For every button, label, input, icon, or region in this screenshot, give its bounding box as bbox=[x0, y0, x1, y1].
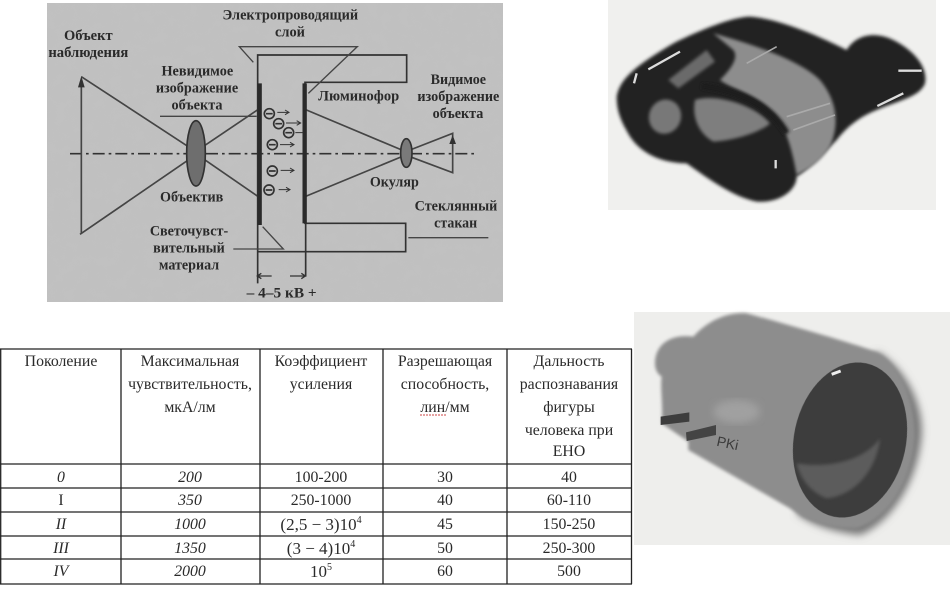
generation II row bbox=[55, 515, 595, 534]
mid body panel bbox=[694, 98, 770, 142]
electrons bbox=[264, 109, 303, 195]
labels: Видимое bbox=[431, 72, 486, 88]
object arrow and rays bbox=[80, 77, 453, 234]
dark strap bbox=[702, 86, 787, 133]
labels: стакан bbox=[434, 215, 477, 231]
labels: Электропроводящий bbox=[222, 8, 358, 24]
labels: Объект bbox=[64, 28, 113, 44]
generation I row: 60-110 bbox=[547, 492, 591, 509]
generation I row: 250-1000 bbox=[291, 492, 351, 509]
body highlight bbox=[713, 400, 760, 423]
leader lines bbox=[160, 116, 488, 249]
generation I row: 350 bbox=[177, 492, 202, 509]
left lens bbox=[644, 95, 686, 138]
top barrel bbox=[668, 50, 715, 88]
glass housing bbox=[258, 55, 407, 283]
column headers: Поколение bbox=[25, 353, 97, 370]
column headers: Коэффициент bbox=[275, 353, 367, 370]
column headers: лин/мм bbox=[420, 399, 470, 416]
labels bbox=[48, 8, 499, 302]
generation IV row: 500 bbox=[557, 563, 581, 580]
photo: night vision binocular bbox=[608, 0, 936, 210]
optical axis bbox=[70, 151, 477, 156]
photocathode and phosphor bbox=[260, 83, 305, 225]
generation II row: II bbox=[55, 516, 67, 533]
generation 0 row: 40 bbox=[561, 469, 577, 486]
table: image intensifier generations bbox=[0, 349, 632, 584]
labels: объекта bbox=[171, 97, 222, 113]
generation IV row: 5 bbox=[327, 562, 332, 573]
generation III row: (3 − 4)10 bbox=[287, 539, 350, 558]
column headers: Разрешающая bbox=[398, 353, 492, 370]
binocular body bbox=[617, 17, 925, 202]
labels: вительный bbox=[153, 241, 225, 257]
brand mark: PKi bbox=[715, 433, 740, 453]
voltage gap arrows bbox=[257, 273, 305, 279]
objective lens bbox=[187, 121, 205, 186]
labels: – 4–5 кВ + bbox=[246, 286, 317, 302]
lens opening bbox=[779, 352, 921, 528]
generation 0 row bbox=[57, 469, 577, 486]
spell-check squiggle bbox=[420, 414, 446, 416]
generation I row bbox=[58, 492, 591, 509]
generation II row: 1000 bbox=[174, 516, 206, 533]
generation III row: 50 bbox=[437, 540, 453, 557]
generation IV row: IV bbox=[53, 563, 71, 580]
photo: night vision monocular tube bbox=[634, 312, 950, 545]
side studs bbox=[661, 412, 689, 425]
eyepiece lens bbox=[401, 139, 412, 167]
labels: Невидимое bbox=[161, 64, 233, 80]
labels: материал bbox=[159, 258, 219, 274]
labels: объекта bbox=[433, 106, 483, 122]
labels: Стеклянный bbox=[415, 198, 497, 214]
generation I row: 40 bbox=[437, 492, 453, 509]
column headers: Дальность bbox=[534, 353, 604, 370]
inner lens crescent bbox=[797, 438, 880, 498]
generation 0 row: 0 bbox=[57, 469, 65, 486]
conductive layer pointer bbox=[239, 47, 357, 93]
generation III row: 1350 bbox=[174, 540, 206, 557]
tube body bbox=[655, 313, 915, 528]
band shading lines bbox=[747, 47, 835, 130]
generation II row: 4 bbox=[357, 515, 362, 526]
column headers: фигуры bbox=[543, 399, 595, 416]
generation 0 row: 100-200 bbox=[295, 469, 347, 486]
column headers: способность, bbox=[401, 376, 489, 393]
column headers: мкА/лм bbox=[164, 399, 216, 416]
generation IV row: 60 bbox=[437, 563, 453, 580]
grey central band bbox=[713, 33, 836, 175]
labels: наблюдения bbox=[48, 45, 129, 61]
generation III row: 4 bbox=[350, 539, 355, 550]
labels: изображение bbox=[156, 80, 238, 96]
generation III row: III bbox=[52, 540, 70, 557]
generation IV row: 10 bbox=[310, 562, 327, 581]
generation II row: (2,5 − 3)10 bbox=[280, 515, 357, 534]
labels: Люминофор bbox=[318, 89, 399, 105]
generation IV row bbox=[53, 562, 581, 581]
arrowheads bbox=[78, 76, 85, 87]
labels: Объектив bbox=[160, 190, 224, 206]
column headers: Максимальная bbox=[141, 353, 239, 370]
labels: Окуляр bbox=[370, 174, 419, 190]
column headers: чувствительность, bbox=[128, 376, 252, 393]
table grid bbox=[0, 349, 632, 584]
column headers: ЕНО bbox=[553, 443, 585, 460]
column headers: человека при bbox=[525, 422, 614, 439]
labels: Светочувст- bbox=[150, 223, 228, 239]
column headers: распознавания bbox=[520, 376, 618, 393]
generation III row bbox=[52, 539, 595, 558]
generation IV row: 2000 bbox=[174, 563, 206, 580]
labels: изображение bbox=[417, 89, 499, 105]
column headers bbox=[25, 353, 618, 460]
tube shadow bbox=[797, 352, 922, 535]
generation 0 row: 30 bbox=[437, 469, 453, 486]
generation 0 row: 200 bbox=[178, 469, 202, 486]
generation II row: 45 bbox=[437, 516, 453, 533]
lens glint bbox=[832, 371, 841, 374]
panel: image intensifier diagram bbox=[47, 3, 503, 302]
column headers: усиления bbox=[290, 376, 352, 393]
generation III row: 250-300 bbox=[543, 540, 595, 557]
labels: слой bbox=[275, 24, 305, 40]
generation II row: 150-250 bbox=[543, 516, 595, 533]
generation I row: I bbox=[58, 492, 64, 509]
highlights bbox=[634, 52, 922, 168]
